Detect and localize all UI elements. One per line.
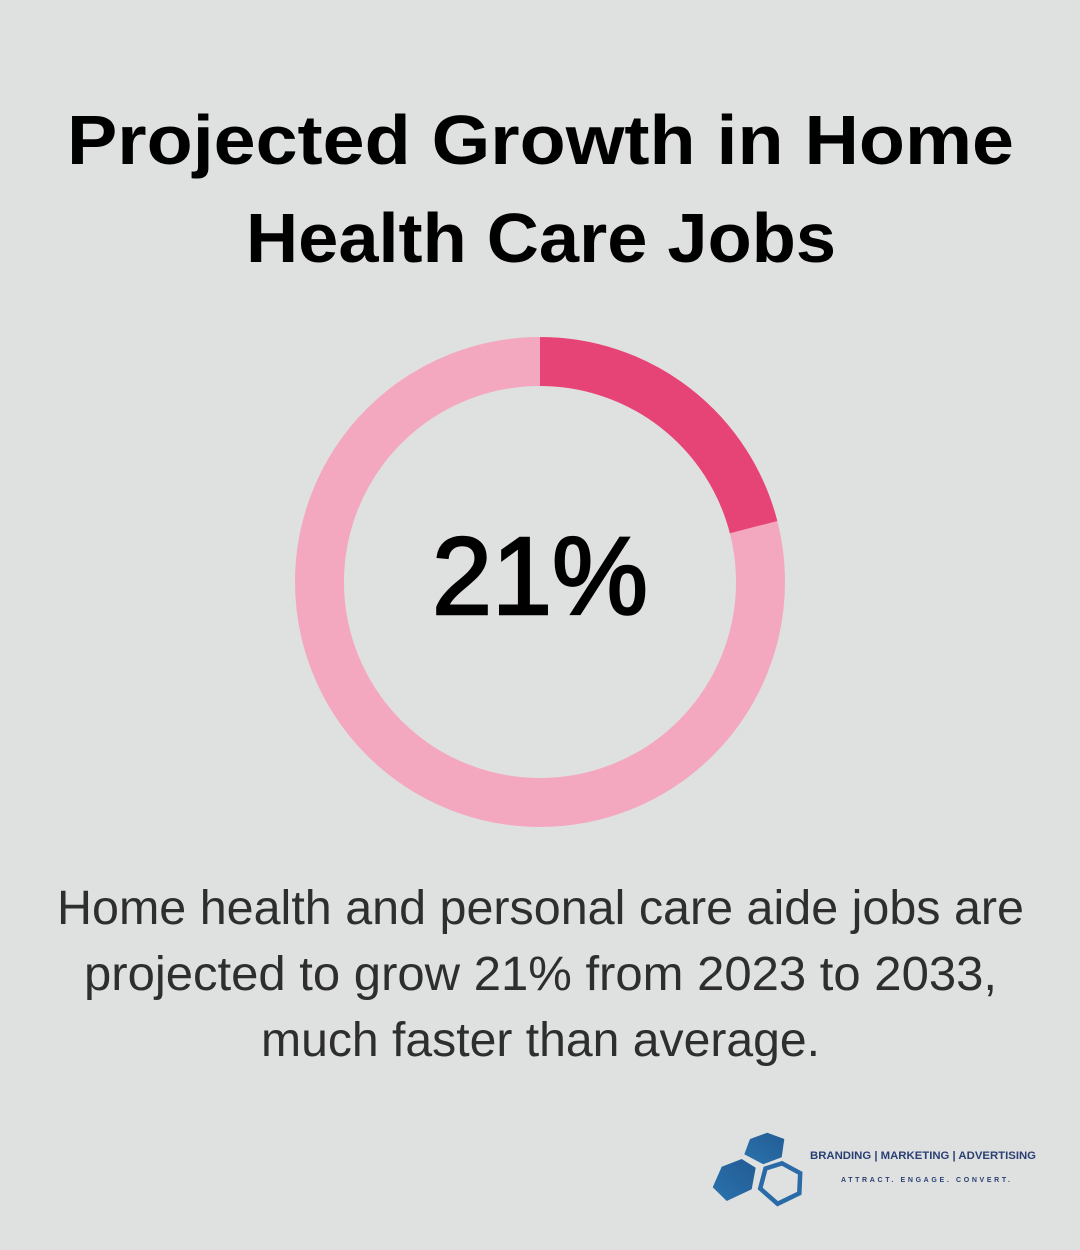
title: Health Care Jobs <box>246 199 836 277</box>
highlighted segment: 21% <box>540 362 754 527</box>
description text <box>57 882 1024 1067</box>
logo text: BRANDING | MARKETING | ADVERTISING <box>810 1150 1036 1162</box>
logo text <box>810 1150 1036 1184</box>
title <box>67 101 1014 277</box>
logo text: ATTRACT. ENGAGE. CONVERT. <box>841 1177 1010 1184</box>
title: Projected Growth in Home <box>67 101 1014 179</box>
icon: hexagons <box>713 1133 800 1204</box>
donut chart: 21 percent <box>320 362 760 802</box>
description text: Home health and personal care aide jobs are <box>57 882 1024 935</box>
description text: much faster than average. <box>261 1014 820 1067</box>
description text: projected to grow 21% from 2023 to 2033, <box>84 948 997 1001</box>
center value: 21% <box>432 515 648 638</box>
logo <box>713 1133 1036 1204</box>
